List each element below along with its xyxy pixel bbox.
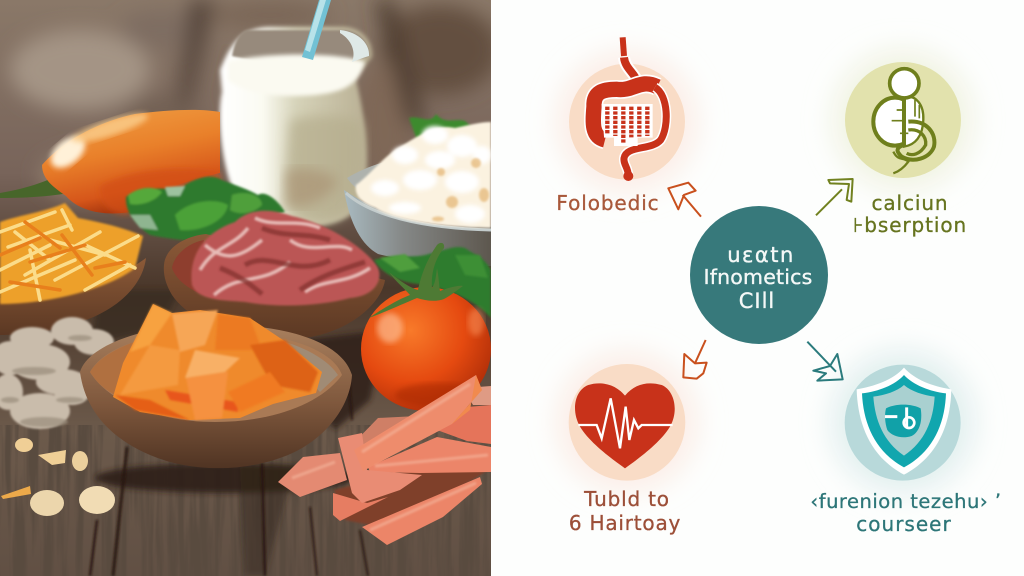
- bacon strips: [278, 375, 491, 545]
- arrow: to heart icon: [683, 340, 707, 379]
- crumbs: [1, 438, 115, 516]
- label: Tubid to 6 Hairtoay: 6 Hairtoay: [569, 511, 681, 535]
- label: calcium absorption: calciun: [871, 191, 949, 215]
- label: furenion tezehu courseer: [810, 490, 1002, 536]
- orange squash: [0, 108, 220, 214]
- icon group: heart: [569, 364, 685, 481]
- central circle label: uεαtn: [727, 243, 795, 267]
- central circle label: Ifnometics: [703, 265, 813, 289]
- mushrooms and nuts: [0, 317, 114, 429]
- rice bowl: [344, 114, 491, 266]
- panel: right background: [491, 0, 1024, 576]
- icon group: shield: [845, 365, 961, 481]
- label: furenion tezehu courseer: courseer: [856, 512, 952, 536]
- arrow: to shield icon: [807, 342, 843, 381]
- central circle label: CIll: [739, 289, 775, 313]
- halo: soft glows behind icons: [557, 50, 975, 494]
- label: Folobedic: Folobedic: [556, 191, 660, 215]
- icon group: calcium absorption: [845, 62, 961, 178]
- green herbs: [126, 177, 285, 241]
- cheese bowl: [0, 203, 146, 335]
- label: calcium absorption: [853, 191, 967, 237]
- label: calcium absorption: ⊦bserption: [853, 213, 967, 237]
- central circle label: [703, 243, 813, 313]
- main bowl with carrot strips: [80, 304, 352, 468]
- wooden table: [0, 0, 500, 576]
- central circle: [690, 206, 828, 344]
- label: furenion tezehu courseer: ‹furenion tezehu› ’: [810, 490, 1002, 513]
- tomato with leaves: [361, 243, 491, 411]
- label: Tubid to 6 Hairtoay: Tubld to: [583, 487, 670, 511]
- arrow: to digestive icon: [668, 183, 701, 217]
- milk jar with straw: [220, 0, 372, 227]
- label: Tubid to 6 Hairtoay: [569, 487, 681, 535]
- panel: food photograph: [0, 0, 500, 576]
- arrow: to calcium icon: [816, 179, 853, 215]
- meat bowl: [164, 211, 385, 339]
- icon group: digestive system: [569, 37, 685, 181]
